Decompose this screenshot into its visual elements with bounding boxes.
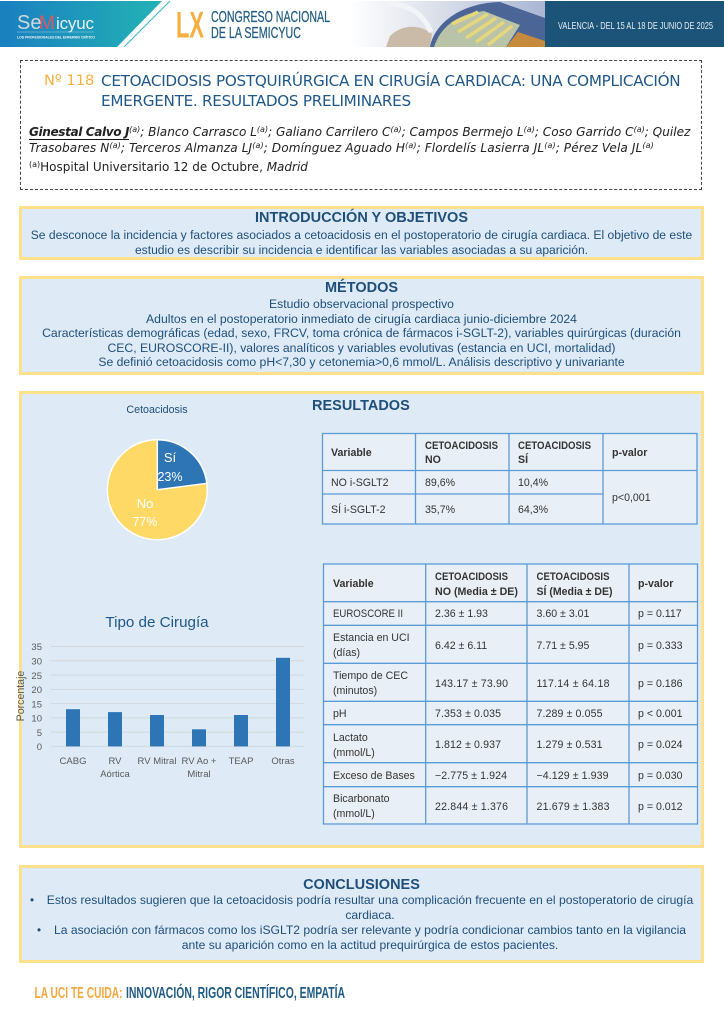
table: variables by cetoacidosis: CETOACIDOSIS [536,571,610,583]
table: variables by cetoacidosis: (minutos) [333,685,377,697]
bar chart: tipo de cirugía: Tipo de Cirugía [105,614,209,631]
logo text [17,12,95,40]
table: variables by cetoacidosis: 7.71 ± 5.95 [536,640,590,652]
table: i-SGLT2 vs cetoacidosis: NO i-SGLT2 [331,477,389,489]
table: variables by cetoacidosis: 1.279 ± 0.531 [536,739,603,751]
methods text: Características demográficas (edad, sexo, FRCV, toma crónica de fármacos i-SGLT-2), variables quirúrgicas (duración [42,326,681,340]
logo text: LOS PROFESIONALES DEL ENFERMO CRÍTICO [17,34,95,40]
methods text: Adultos en el postoperatorio inmediato de cirugía cardiaca junio-diciembre 2024 [146,312,577,326]
table: variables by cetoacidosis: 7.353 ± 0.035 [435,708,501,720]
methods text: Se definió cetoacidosis como pH<7,30 y cetonemia>0,6 mmol/L. Análisis descriptivo y univariante [98,355,625,369]
panel: results [19,391,704,848]
conclusions text: La asociación con fármacos como los iSGLT2 podría ser relevante y podría condicionar cambios tanto en la vigilancia [54,923,686,937]
congress title: DE LA SEMICYUC [211,25,301,42]
pie chart: cetoacidosis: Cetoacidosis [126,404,188,416]
table: variables by cetoacidosis: −2.775 ± 1.924 [435,770,507,782]
table: variables by cetoacidosis: p = 0.030 [638,770,683,782]
poster number: Nº 118 [44,72,94,89]
poster title: EMERGENTE. RESULTADOS PRELIMINARES [101,92,411,110]
table: variables by cetoacidosis: −4.129 ± 1.939 [536,770,609,782]
table: variables by cetoacidosis: Lactato [333,732,368,744]
intro text [31,228,692,257]
affiliation: (a)Hospital Universitario 12 de Octubre, Madrid [29,160,308,174]
table: i-SGLT2 vs cetoacidosis: 64,3% [518,504,549,516]
table: variables by cetoacidosis: (días) [333,647,360,659]
bar chart: tipo de cirugía: 10 [31,714,42,724]
poster title: CETOACIDOSIS POSTQUIRÚRGICA EN CIRUGÍA CARDIACA: UNA COMPLICACIÓN [101,72,680,90]
table: i-SGLT2 vs cetoacidosis: 35,7% [425,504,456,516]
table: variables by cetoacidosis: p = 0.024 [638,739,683,751]
table: i-SGLT2 vs cetoacidosis: SÍ [518,453,529,466]
bar chart: tipo de cirugía: CABG [60,756,86,767]
bullet 2: • [37,924,41,937]
table: variables by cetoacidosis: Bicarbonato [333,793,390,805]
table: variables by cetoacidosis: p-valor [638,578,673,590]
bar chart: tipo de cirugía: RV Ao + [182,756,217,767]
panel: introduction and objectives [19,206,704,260]
bar chart: tipo de cirugía: Mitral [187,769,211,780]
table: variables by cetoacidosis: CETOACIDOSIS [435,571,508,583]
table: i-SGLT2 vs cetoacidosis: NO [425,454,441,466]
bar chart: tipo de cirugía: Porcentaje [15,671,27,721]
poster title [101,72,680,110]
table: i-SGLT2 vs cetoacidosis: Variable [331,447,372,459]
pie chart: cetoacidosis: 77% [132,515,158,529]
table: variables by cetoacidosis: Estancia en UCI [333,632,410,644]
table: variables by cetoacidosis: 21.679 ± 1.383 [536,801,610,813]
table: i-SGLT2 vs cetoacidosis: p-valor [612,447,647,459]
table: variables by cetoacidosis: p = 0.117 [638,608,682,620]
methods text [42,297,681,369]
conclusions text: ante su aparición como en la actitud prequirúrgica de estos pacientes. [182,938,558,952]
table: i-SGLT2 vs cetoacidosis: SÍ i-SGLT-2 [331,503,386,516]
table: i-SGLT2 vs cetoacidosis: 89,6% [425,477,456,489]
bar chart: tipo de cirugía: 30 [31,656,42,668]
bar chart: tipo de cirugía: TEAP [229,756,253,767]
table: variables by cetoacidosis: NO (Media ± DE) [435,586,518,598]
header banner [0,0,724,48]
pie chart: cetoacidosis: No [137,496,153,511]
table: variables by cetoacidosis: Exceso de Bases [333,770,415,782]
logo text: Se [17,12,41,34]
table: variables by cetoacidosis: (mmol/L) [333,808,375,820]
logo text: M [39,13,55,34]
bar chart: tipo de cirugía: 25 [31,671,42,682]
table: variables by cetoacidosis: 6.42 ± 6.11 [435,640,487,652]
table: variables by cetoacidosis: p = 0.012 [638,801,683,813]
bar chart: tipo de cirugía: 5 [37,728,42,739]
table: i-SGLT2 vs cetoacidosis: 10,4% [518,477,549,489]
table: variables by cetoacidosis: 7.289 ± 0.055 [536,708,603,720]
footer slogan: LA UCI TE CUIDA: [34,985,122,1002]
table: variables by cetoacidosis: 143.17 ± 73.90 [435,678,508,690]
bullet 1: • [30,894,34,907]
intro text: estudio es describir su incidencia e identificar las variables asociadas a su aparición. [135,243,588,257]
table: variables by cetoacidosis: (mmol/L) [333,747,375,759]
table: variables by cetoacidosis: pH [333,708,347,720]
table: i-SGLT2 vs cetoacidosis: CETOACIDOSIS [518,440,591,452]
congress title: CONGRESO NACIONAL [211,9,330,26]
table: variables by cetoacidosis: EUROSCORE II [333,608,403,620]
panel: conclusions [19,865,704,963]
table: variables by cetoacidosis: 117.14 ± 64.18 [536,678,610,690]
table: variables by cetoacidosis: 1.812 ± 0.937 [435,739,501,751]
bar chart: tipo de cirugía: 15 [31,700,42,710]
results heading: RESULTADOS [312,398,410,414]
bar chart: tipo de cirugía: 20 [31,685,42,696]
bar chart: tipo de cirugía: 0 [37,742,42,753]
authors [29,125,691,155]
intro text: Se desconoce la incidencia y factores asociados a cetoacidosis en el postoperatorio de cirugía cardiaca. El objetivo de este [31,228,692,242]
logo text: icyuc [56,14,94,33]
conclusions text: cardiaca. [345,908,395,922]
bar chart: tipo de cirugía: RV [108,756,122,767]
table: variables by cetoacidosis: 2.36 ± 1.93 [435,608,488,620]
bar chart: tipo de cirugía: Otras [271,756,295,767]
heading: MÉTODOS [325,280,398,296]
panel: methods [19,276,704,375]
table: variables by cetoacidosis: p = 0.333 [638,640,683,652]
footer slogan: INNOVACIÓN, RIGOR CIENTÍFICO, EMPATÍA [126,984,345,1002]
pie chart: cetoacidosis: Sí [164,450,177,465]
table: variables by cetoacidosis: 3.60 ± 3.01 [536,608,590,620]
congress title: LX [176,4,204,46]
table: i-SGLT2 vs cetoacidosis: CETOACIDOSIS [425,440,498,452]
heading: CONCLUSIONES [303,877,420,893]
authors: Ginestal Calvo J(a); Blanco Carrasco L(a); Galiano Carrilero C(a); Campos Bermejo L(a); Coso Garrido C(a); Quilez [29,125,690,139]
table: variables by cetoacidosis: Variable [333,578,374,590]
table: variables by cetoacidosis: 22.844 ± 1.376 [435,801,508,813]
table: variables by cetoacidosis: SÍ (Media ± DE) [536,585,612,598]
panel: title and authors [20,60,702,190]
bar chart: tipo de cirugía: Aórtica [100,769,130,780]
bar chart: tipo de cirugía: 35 [31,642,42,653]
authors: Trasobares N(a); Terceros Almanza LJ(a); Domínguez Aguado H(a); Flordelís Lasierra JL(a); Pérez Vela JL(a) [29,141,654,155]
heading: INTRODUCCIÓN Y OBJETIVOS [255,210,468,226]
conclusions text: Estos resultados sugieren que la cetoacidosis podría resultar una complicación frecuente en el postoperatorio de cirugía [47,893,693,907]
table: variables by cetoacidosis: Tiempo de CEC [333,670,408,682]
table: i-SGLT2 vs cetoacidosis: p<0,001 [612,492,651,504]
methods text: CEC, EUROSCORE-II), valores analíticos y variables evolutivas (estancia en UCI, mortalidad) [108,341,616,355]
table: variables by cetoacidosis: p = 0.186 [638,678,683,690]
table: variables by cetoacidosis: p < 0.001 [638,708,683,720]
methods text: Estudio observacional prospectivo [269,297,454,311]
pie chart: cetoacidosis: 23% [157,470,183,484]
congress title [176,4,330,46]
bar chart: tipo de cirugía: RV Mitral [138,756,176,767]
conclusions text [47,893,694,952]
